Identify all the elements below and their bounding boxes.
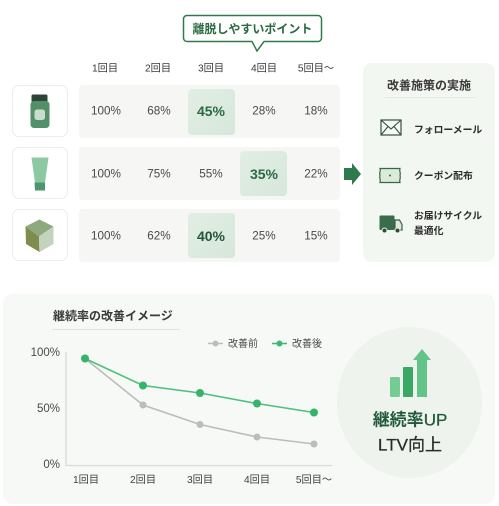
row: tube retention: 22% xyxy=(304,168,328,180)
table header: 1回目 xyxy=(92,64,118,74)
line chart: 5回目〜 xyxy=(296,474,332,486)
table header: 4回目 xyxy=(251,64,277,74)
row: box retention: 15% xyxy=(304,230,328,242)
label: coupon: クーポン配布 xyxy=(414,171,473,182)
label: follow-up mail: フォローメール xyxy=(414,125,482,136)
label: delivery cycle: お届けサイクル xyxy=(414,211,482,222)
icon: truck xyxy=(380,216,403,232)
line chart: 1回目 xyxy=(73,474,99,486)
row: tube retention: 55% xyxy=(199,168,223,180)
line chart: 2回目 xyxy=(130,474,156,486)
legend xyxy=(208,337,322,350)
row: box retention: 62% xyxy=(147,230,171,242)
legend: 改善後 xyxy=(292,337,322,350)
panel: retention improvement xyxy=(3,294,495,504)
table header xyxy=(92,63,334,74)
callout: drop-off point: 離脱しやすいポイント xyxy=(193,21,312,36)
panel heading: 改善施策の実施 xyxy=(387,78,471,92)
icon: envelope xyxy=(380,119,402,136)
arrow to measures xyxy=(344,163,361,185)
row: box retention: 40% xyxy=(197,228,225,244)
row: tube retention xyxy=(79,147,340,200)
row: tube retention: 100% xyxy=(91,168,121,180)
table header: 2回目 xyxy=(145,64,171,74)
row: bottle retention: 28% xyxy=(252,104,276,118)
product card: box xyxy=(12,209,68,261)
row: bottle retention xyxy=(79,85,340,138)
line chart: 100% xyxy=(31,347,60,359)
text: retention up: 継続率UP xyxy=(373,410,447,430)
label: delivery cycle: 最適化 xyxy=(414,226,443,236)
heading: chart title: 継続率の改善イメージ xyxy=(53,309,173,323)
row: box retention xyxy=(79,209,340,262)
row: bottle retention: 45% xyxy=(197,103,225,119)
legend: 改善前 xyxy=(228,337,258,350)
table header: 3回目 xyxy=(198,64,224,74)
row: tube retention: 75% xyxy=(147,168,171,180)
line chart: 4回目 xyxy=(244,474,270,486)
line chart: 0% xyxy=(43,459,60,471)
row: box retention: 100% xyxy=(91,230,121,242)
product card: bottle xyxy=(12,85,68,137)
callout circle: retention up, LTV up xyxy=(337,327,482,478)
row: tube retention: 35% xyxy=(250,166,278,182)
series: before xyxy=(85,358,318,448)
callout: drop-off point xyxy=(182,14,322,52)
icon: coupon xyxy=(379,168,401,184)
series: after xyxy=(81,354,318,416)
row: bottle retention: 100% xyxy=(91,104,121,118)
table header: 5回目〜 xyxy=(298,64,334,74)
line chart: 3回目 xyxy=(187,474,213,486)
row: bottle retention: 68% xyxy=(147,104,171,118)
text: LTV up: LTV向上 xyxy=(378,436,442,454)
row: bottle retention: 18% xyxy=(304,104,328,118)
product card: tube xyxy=(12,147,68,199)
panel: improvement measures xyxy=(363,63,495,262)
line chart xyxy=(31,337,332,486)
label: delivery cycle xyxy=(414,210,482,236)
row: box retention: 25% xyxy=(252,230,276,242)
line chart: 50% xyxy=(37,403,60,415)
icon: growth bars with arrow xyxy=(390,349,431,397)
